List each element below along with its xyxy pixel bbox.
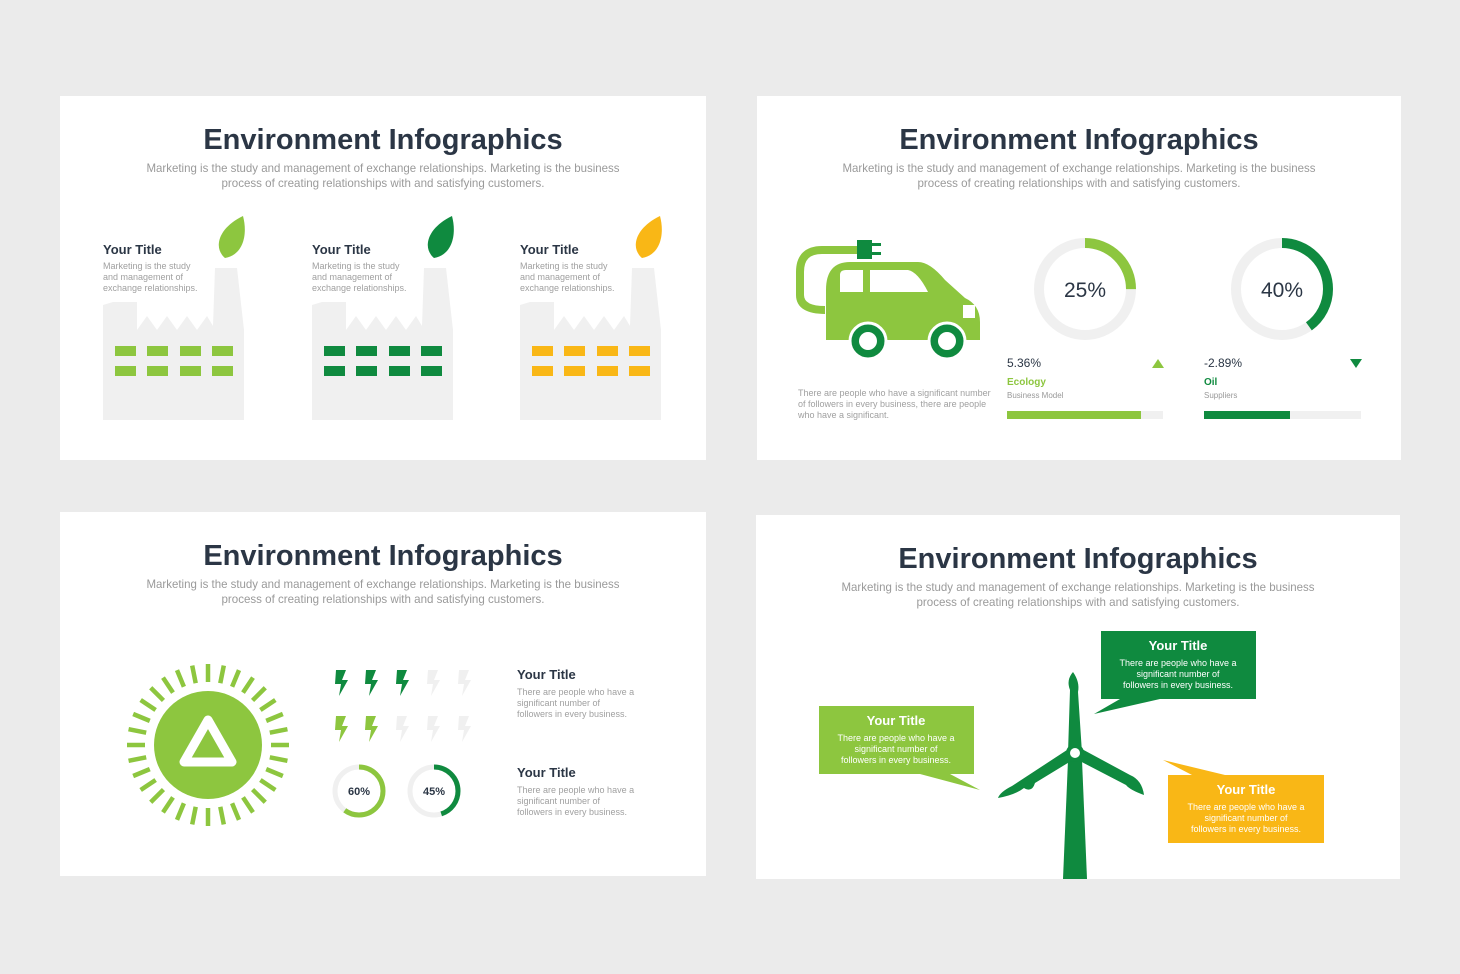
stat oil: Suppliers: [1204, 391, 1237, 400]
factory 1: Marketing is the study: [103, 261, 191, 271]
callout: light green: followers in every business.: [841, 755, 951, 765]
panel: electric car: [757, 96, 1401, 460]
title: Environment Infographics: [898, 543, 1258, 575]
stat oil: Oil: [1204, 377, 1218, 388]
text block 2: Your Title: [517, 765, 576, 780]
factory 3: exchange relationships.: [520, 283, 615, 293]
donut 60%: 60%: [348, 786, 370, 798]
title: Environment Infographics: [203, 124, 563, 156]
factory 3: Your Title: [520, 242, 579, 257]
bolts: [335, 670, 471, 742]
subtitle: Marketing is the study and management of exchange relationships. Marketing is the business: [842, 161, 1316, 175]
factory 1: [103, 216, 245, 420]
stat ecology: Business Model: [1007, 391, 1064, 400]
subtitle: Marketing is the study and management of exchange relationships. Marketing is the business: [842, 580, 1314, 594]
factory 3: and management of: [520, 272, 601, 282]
factory 2: exchange relationships.: [312, 283, 407, 293]
callout: yellow: significant number of: [1204, 813, 1288, 823]
callout: dark green: followers in every business.: [1123, 680, 1233, 690]
text block 2: significant number of: [517, 796, 601, 806]
callout: light green: [819, 706, 980, 790]
stat ecology: [1007, 356, 1164, 419]
title: Environment Infographics: [899, 124, 1259, 156]
icon: car: [800, 240, 980, 359]
subtitle: process of creating relationships with and satisfying customers.: [916, 595, 1240, 609]
factory 1: and management of: [103, 272, 184, 282]
stat oil: [1204, 356, 1362, 419]
donut 40%: [1236, 243, 1328, 335]
donut 25%: [1039, 243, 1131, 335]
factory 3: [520, 216, 662, 420]
subtitle: process of creating relationships with and satisfying customers.: [918, 176, 1240, 190]
panel: windmill: [756, 515, 1400, 879]
callout: yellow: There are people who have a: [1187, 802, 1305, 812]
callout: light green: significant number of: [854, 744, 938, 754]
donut 60%: [335, 767, 383, 815]
subtitle: [146, 161, 620, 190]
text block 2: [517, 765, 634, 817]
subtitle: Marketing is the study and management of exchange relationships. Marketing is the business: [146, 577, 620, 591]
subtitle: Marketing is the study and management of exchange relationships. Marketing is the business: [146, 161, 620, 175]
donut 45%: 45%: [423, 786, 445, 798]
text block: There are people who have a significant number: [798, 388, 991, 398]
subtitle: [146, 577, 620, 606]
donut 45%: [410, 767, 458, 815]
callout: yellow: [1163, 760, 1324, 843]
panel: recycle sun: [60, 512, 706, 876]
text block: of followers in every business, there are people: [798, 399, 986, 409]
text block: who have a significant.: [797, 410, 889, 420]
stat ecology: 5.36%: [1007, 356, 1041, 370]
donut 40%: 40%: [1261, 279, 1303, 302]
factory 2: and management of: [312, 272, 393, 282]
text block 1: There are people who have a: [517, 687, 634, 697]
text block 1: Your Title: [517, 667, 576, 682]
title: Environment Infographics: [203, 540, 563, 572]
stat oil: -2.89%: [1204, 356, 1242, 370]
callout: dark green: There are people who have a: [1119, 658, 1237, 668]
subtitle: process of creating relationships with and satisfying customers.: [222, 176, 544, 190]
factory 2: Your Title: [312, 242, 371, 257]
icon: recycle sun: [127, 664, 289, 826]
factory 1: exchange relationships.: [103, 283, 198, 293]
factory 2: [312, 216, 454, 420]
callout: dark green: significant number of: [1136, 669, 1220, 679]
subtitle: [842, 161, 1316, 190]
donut 25%: 25%: [1064, 279, 1106, 302]
callout: dark green: [1094, 631, 1256, 714]
text block 1: followers in every business.: [517, 709, 627, 719]
text block 2: There are people who have a: [517, 785, 634, 795]
callout: yellow: Your Title: [1217, 782, 1275, 797]
callout: light green: Your Title: [867, 713, 925, 728]
subtitle: process of creating relationships with and satisfying customers.: [222, 592, 544, 606]
factory 1: Your Title: [103, 242, 162, 257]
callout: yellow: followers in every business.: [1191, 824, 1301, 834]
factory 2: Marketing is the study: [312, 261, 400, 271]
icon: windmill: [998, 672, 1144, 879]
subtitle: [842, 580, 1314, 609]
text block 1: [517, 667, 634, 719]
callout: light green: There are people who have a: [837, 733, 955, 743]
text block 2: followers in every business.: [517, 807, 627, 817]
stat ecology: Ecology: [1007, 377, 1046, 388]
panel: factories: [60, 96, 706, 460]
factory 3: Marketing is the study: [520, 261, 608, 271]
text block 1: significant number of: [517, 698, 601, 708]
callout: dark green: Your Title: [1149, 638, 1207, 653]
